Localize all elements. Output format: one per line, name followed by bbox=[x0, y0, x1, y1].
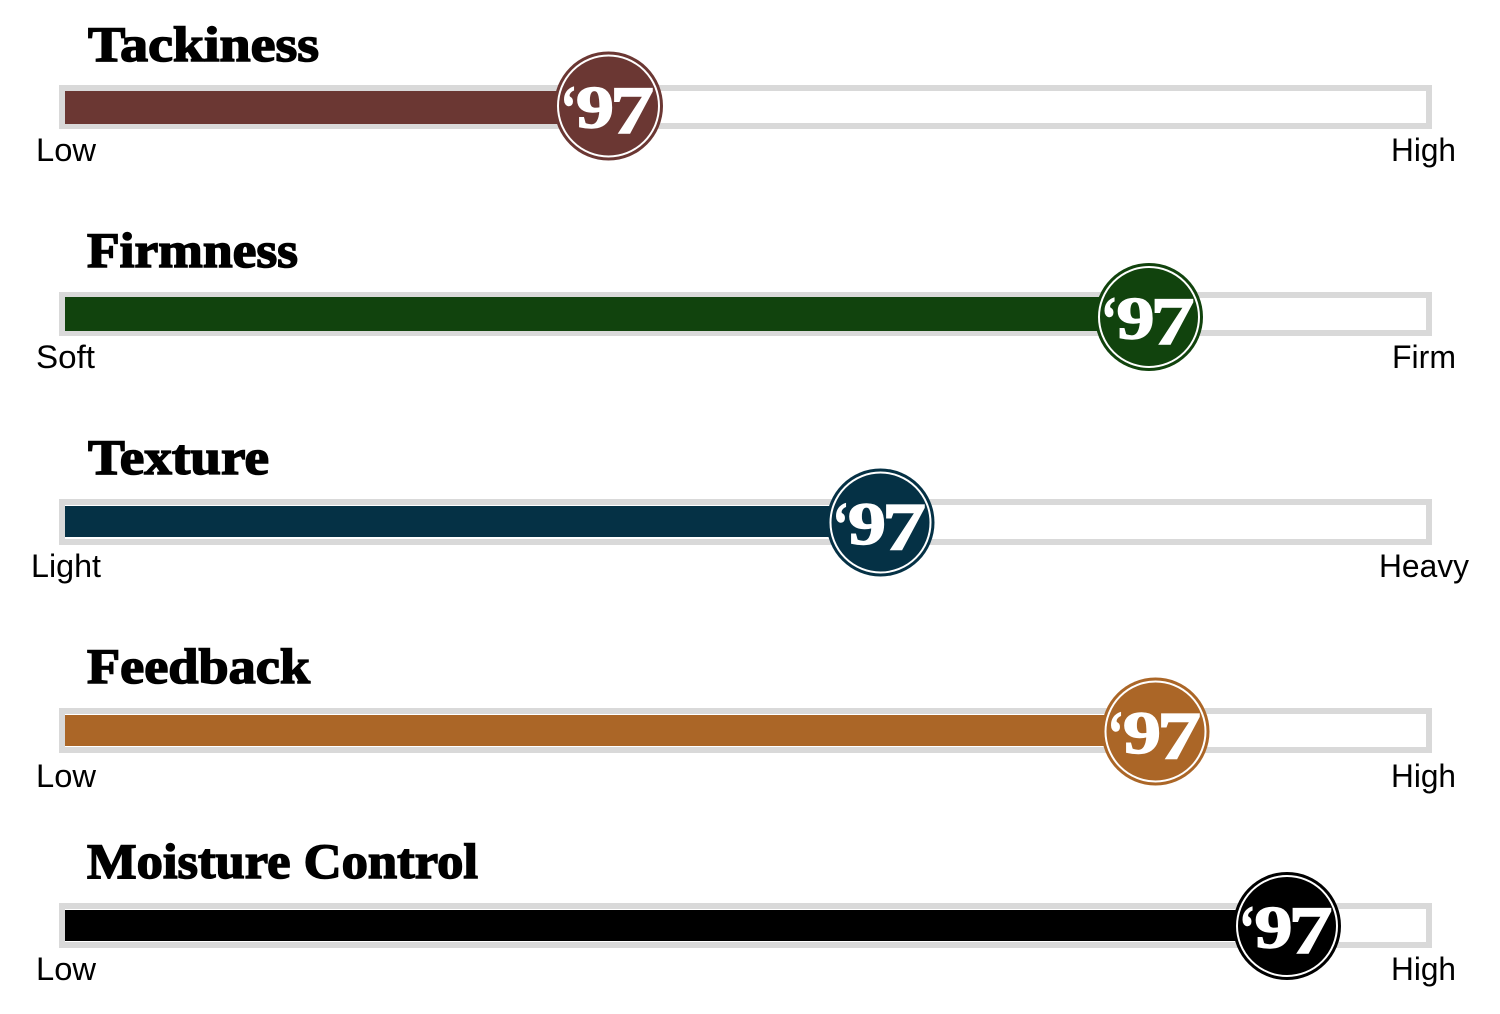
panel: Feedback slider bbox=[36, 638, 1456, 794]
heading: Firmness: Firmness bbox=[87, 222, 298, 278]
heading: Feedback: Feedback bbox=[87, 638, 310, 694]
badge: Texture '97: 9 bbox=[848, 491, 886, 557]
badge: Texture '97: 7 bbox=[882, 488, 926, 564]
label: Soft: Soft bbox=[36, 339, 95, 375]
badge: Moisture Control '97: ‘ bbox=[1240, 894, 1254, 960]
panel: Firmness slider bbox=[36, 222, 1456, 375]
panel: Tackiness slider bbox=[36, 16, 1456, 168]
label: High: High bbox=[1391, 758, 1456, 794]
badge: Tackiness '97 bbox=[554, 52, 663, 160]
track: Tackiness bbox=[62, 88, 1429, 126]
label: High: High bbox=[1391, 951, 1456, 987]
badge: Texture '97: ‘ bbox=[833, 491, 848, 557]
heading: Tackiness: Tackiness bbox=[88, 16, 319, 72]
badge: Feedback '97: ‘ bbox=[1108, 700, 1123, 766]
badge: Texture '97 bbox=[826, 468, 934, 576]
badge: Firmness '97: ‘ bbox=[1102, 286, 1116, 352]
label: Low: Low bbox=[36, 132, 97, 168]
panel: Texture slider bbox=[31, 429, 1469, 584]
badge: Tackiness '97: ‘ bbox=[561, 74, 576, 140]
bar: Firmness level bbox=[65, 297, 1105, 331]
bar: Texture level bbox=[65, 506, 845, 537]
track: Firmness bbox=[62, 295, 1429, 333]
track: Feedback bbox=[62, 711, 1429, 750]
badge: Moisture Control '97 bbox=[1233, 872, 1341, 980]
badge: Firmness '97: 7 bbox=[1150, 283, 1194, 359]
badge: Firmness '97 bbox=[1095, 263, 1203, 371]
label: Heavy: Heavy bbox=[1379, 548, 1469, 584]
heading: Moisture Control: Moisture Control bbox=[87, 833, 478, 889]
label: Low: Low bbox=[36, 951, 97, 987]
badge: Moisture Control '97: 7 bbox=[1288, 892, 1332, 968]
badge: Firmness '97: 9 bbox=[1116, 286, 1154, 352]
label: Low: Low bbox=[36, 758, 97, 794]
badge: Feedback '97: 9 bbox=[1123, 700, 1161, 766]
badge: Feedback '97: 7 bbox=[1157, 698, 1201, 774]
badge: Tackiness '97: 7 bbox=[610, 72, 654, 148]
track: Moisture Control bbox=[62, 906, 1429, 945]
bar: Feedback level bbox=[65, 715, 1115, 746]
track: Texture bbox=[62, 502, 1429, 542]
bar: Tackiness level bbox=[65, 91, 565, 124]
badge: Feedback '97 bbox=[1102, 678, 1210, 786]
badge: Moisture Control '97: 9 bbox=[1254, 894, 1292, 960]
label: Firm: Firm bbox=[1392, 339, 1456, 375]
label: High: High bbox=[1391, 132, 1456, 168]
heading: Texture: Texture bbox=[88, 429, 269, 485]
badge: Tackiness '97: 9 bbox=[576, 74, 614, 140]
bar: Moisture Control level bbox=[65, 910, 1245, 941]
panel: Moisture Control slider bbox=[36, 833, 1456, 987]
label: Light: Light bbox=[31, 548, 101, 584]
